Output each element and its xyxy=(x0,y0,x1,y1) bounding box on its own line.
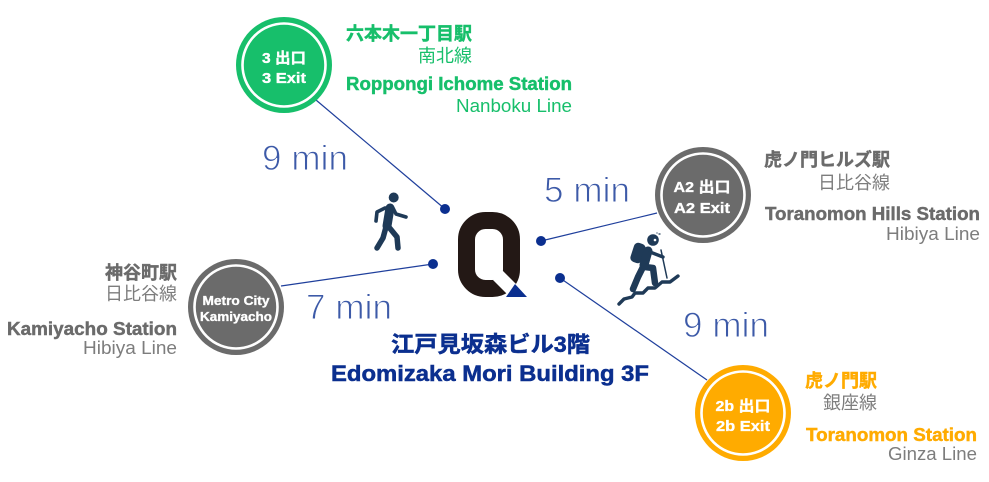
route line: Kamiyacho xyxy=(281,259,438,286)
exit badge: A2 Exit xyxy=(655,147,751,243)
exit badge: 3 Exit xyxy=(236,17,332,113)
exit badge: 2b Exit xyxy=(695,365,791,461)
exit badge: Metro City Kamiyacho: Metro City xyxy=(202,294,270,308)
station label: Roppongi Ichome: Nanboku Line xyxy=(456,95,572,116)
station label: Toranomon: Toranomon Station xyxy=(806,424,977,445)
building name: 江戸見坂森ビル3階 xyxy=(391,332,590,357)
station label: Roppongi Ichome: 六本木一丁目駅 xyxy=(346,24,472,44)
station label: Toranomon Hills: 虎ノ門ヒルズ駅 xyxy=(764,149,890,170)
building name: Edomizaka Mori Building 3F xyxy=(331,361,649,386)
station label: Toranomon Hills: Toranomon Hills Station xyxy=(765,203,980,224)
walking time: 9 min: 9 min xyxy=(683,306,769,345)
exit badge: Metro City Kamiyacho xyxy=(188,259,284,355)
station label: Toranomon: 銀座線 xyxy=(823,393,877,413)
station label: Toranomon: Ginza Line xyxy=(888,443,977,464)
exit badge: Metro City Kamiyacho: Kamiyacho xyxy=(200,310,272,324)
station label: Roppongi Ichome xyxy=(346,24,572,116)
exit badge: 3 Exit: 3 出口 xyxy=(262,50,306,67)
station label: Toranomon xyxy=(805,371,977,464)
walking time: 7 min: 7 min xyxy=(306,288,392,327)
icon: walking person xyxy=(376,192,406,248)
route line: Toranomon Hills xyxy=(536,213,657,246)
station label: Kamiyacho: Kamiyacho Station xyxy=(7,318,177,339)
exit badge: 2b Exit: 2b 出口 xyxy=(716,398,770,415)
station label: Toranomon Hills: Hibiya Line xyxy=(886,223,980,244)
building name xyxy=(331,332,649,386)
exit badge: A2 Exit: A2 出口 xyxy=(674,179,730,196)
station label: Kamiyacho xyxy=(7,263,177,358)
station label: Roppongi Ichome: 南北線 xyxy=(418,46,472,66)
station label: Toranomon Hills xyxy=(764,149,980,244)
station label: Toranomon: 虎ノ門駅 xyxy=(805,371,877,391)
station label: Kamiyacho: 神谷町駅 xyxy=(105,263,177,283)
walking time: 9 min: 9 min xyxy=(262,139,348,178)
exit badge: A2 Exit: A2 Exit xyxy=(674,200,730,217)
station label: Toranomon Hills: 日比谷線 xyxy=(818,173,890,193)
route line: Roppongi Ichome xyxy=(316,100,450,214)
station label: Kamiyacho: 日比谷線 xyxy=(105,284,177,304)
logo: Q mark xyxy=(466,220,530,300)
route line: Toranomon xyxy=(555,273,707,380)
exit badge: 2b Exit: 2b Exit xyxy=(716,418,770,435)
station label: Kamiyacho: Hibiya Line xyxy=(83,337,177,358)
walking time: 5 min: 5 min xyxy=(544,171,630,210)
icon: hiker climbing stairs xyxy=(619,233,678,304)
exit badge: 3 Exit: 3 Exit xyxy=(262,70,306,87)
station label: Roppongi Ichome: Roppongi Ichome Station xyxy=(346,73,572,94)
